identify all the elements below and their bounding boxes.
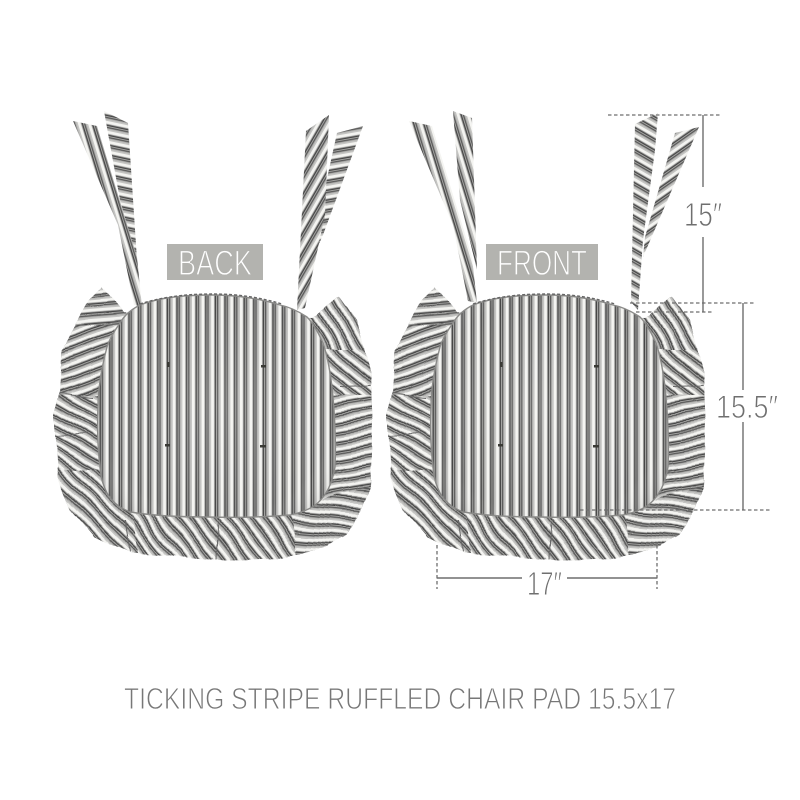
icon: back left tie outer [73, 121, 142, 307]
dimension: tie length 15 inches: 15″ [684, 196, 722, 233]
dimension: pad width 17 inches: 17″ [527, 565, 562, 602]
icon: back left tie inner [104, 111, 137, 260]
icon: front left tie outer [409, 121, 477, 303]
icon: back right tie outer [308, 126, 363, 268]
panel: back view chair pad [40, 111, 400, 570]
icon: front right tie outer [643, 127, 699, 257]
chair pad front [373, 280, 733, 570]
title: TICKING STRIPE RUFFLED CHAIR PAD 15.5x17 [124, 681, 676, 716]
dimension: pad width 17 inches [437, 545, 657, 602]
dimension: pad depth 15.5 inches [580, 303, 778, 510]
label box: FRONT: FRONT [497, 244, 587, 283]
chair pad back [40, 280, 400, 570]
panel: front view chair pad [373, 111, 733, 570]
icon: front right tie inner [631, 113, 658, 310]
dimension: pad depth 15.5 inches: 15.5″ [716, 389, 778, 425]
dimension: tie length 15 inches [608, 115, 722, 312]
label box: BACK: BACK [178, 244, 252, 283]
icon: back right tie inner [297, 115, 329, 310]
icon: front left tie inner [453, 111, 477, 270]
